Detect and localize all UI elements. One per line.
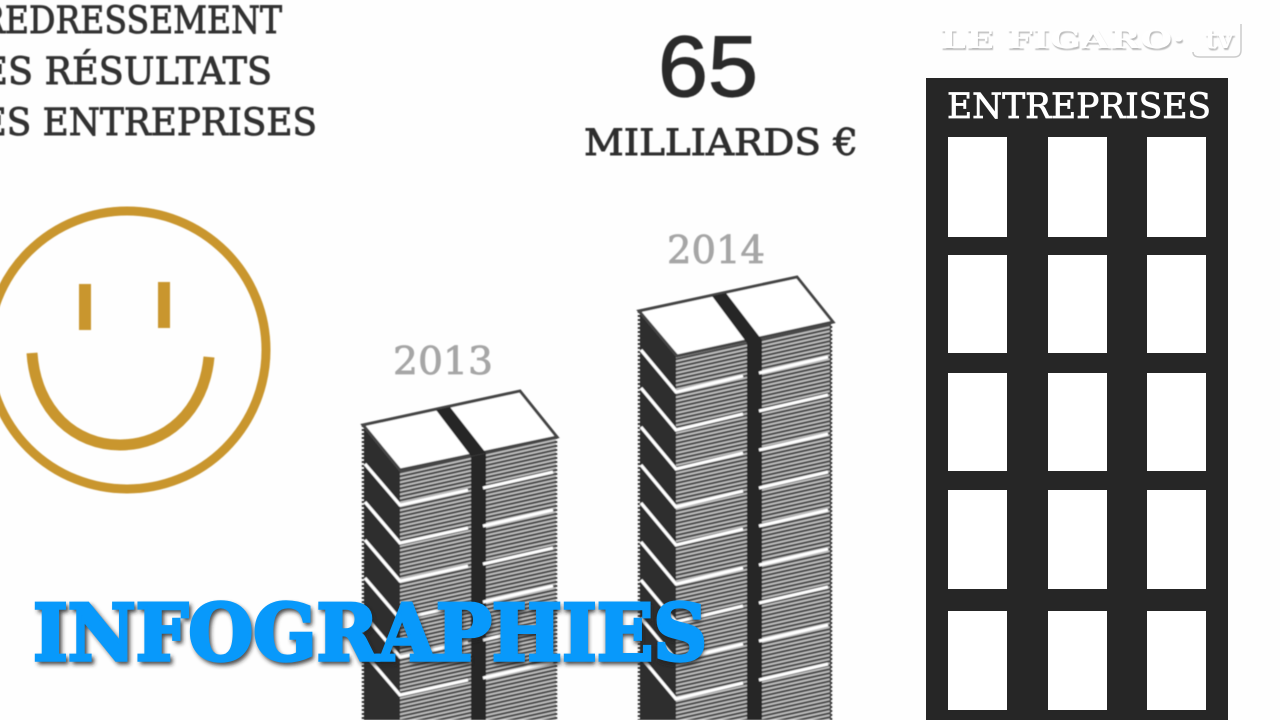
label: 2014: 2014 (667, 228, 765, 272)
building windows (948, 137, 1206, 710)
heading: redressement des résultats des entreprises (0, 0, 317, 144)
figure: 65 milliards €: 65 (658, 19, 758, 115)
title: infographies: INFOGRAPHIES (33, 588, 707, 679)
chart: 2014 stack of banknotes (639, 277, 833, 720)
title: infographies: INFOGRAPHIES (36, 591, 707, 682)
logo: le figaro tv: tv (1206, 26, 1235, 57)
label: 2013: 2013 (393, 339, 493, 383)
logo: le figaro tv: LE FIGARO· (941, 27, 1186, 56)
building label: ENTREPRISES (947, 87, 1211, 127)
chart: 2013 stack of banknotes (363, 391, 557, 720)
building: entreprises (926, 78, 1228, 720)
figure: 65 milliards € (584, 19, 858, 164)
figure: 65 milliards €: MILLIARDS € (584, 123, 858, 164)
logo: le figaro tv (940, 24, 1241, 57)
icon: smiley (0, 211, 266, 489)
logo: le figaro tv: LE FIGARO· (940, 25, 1185, 54)
logo: le figaro tv: tv (1205, 24, 1234, 55)
